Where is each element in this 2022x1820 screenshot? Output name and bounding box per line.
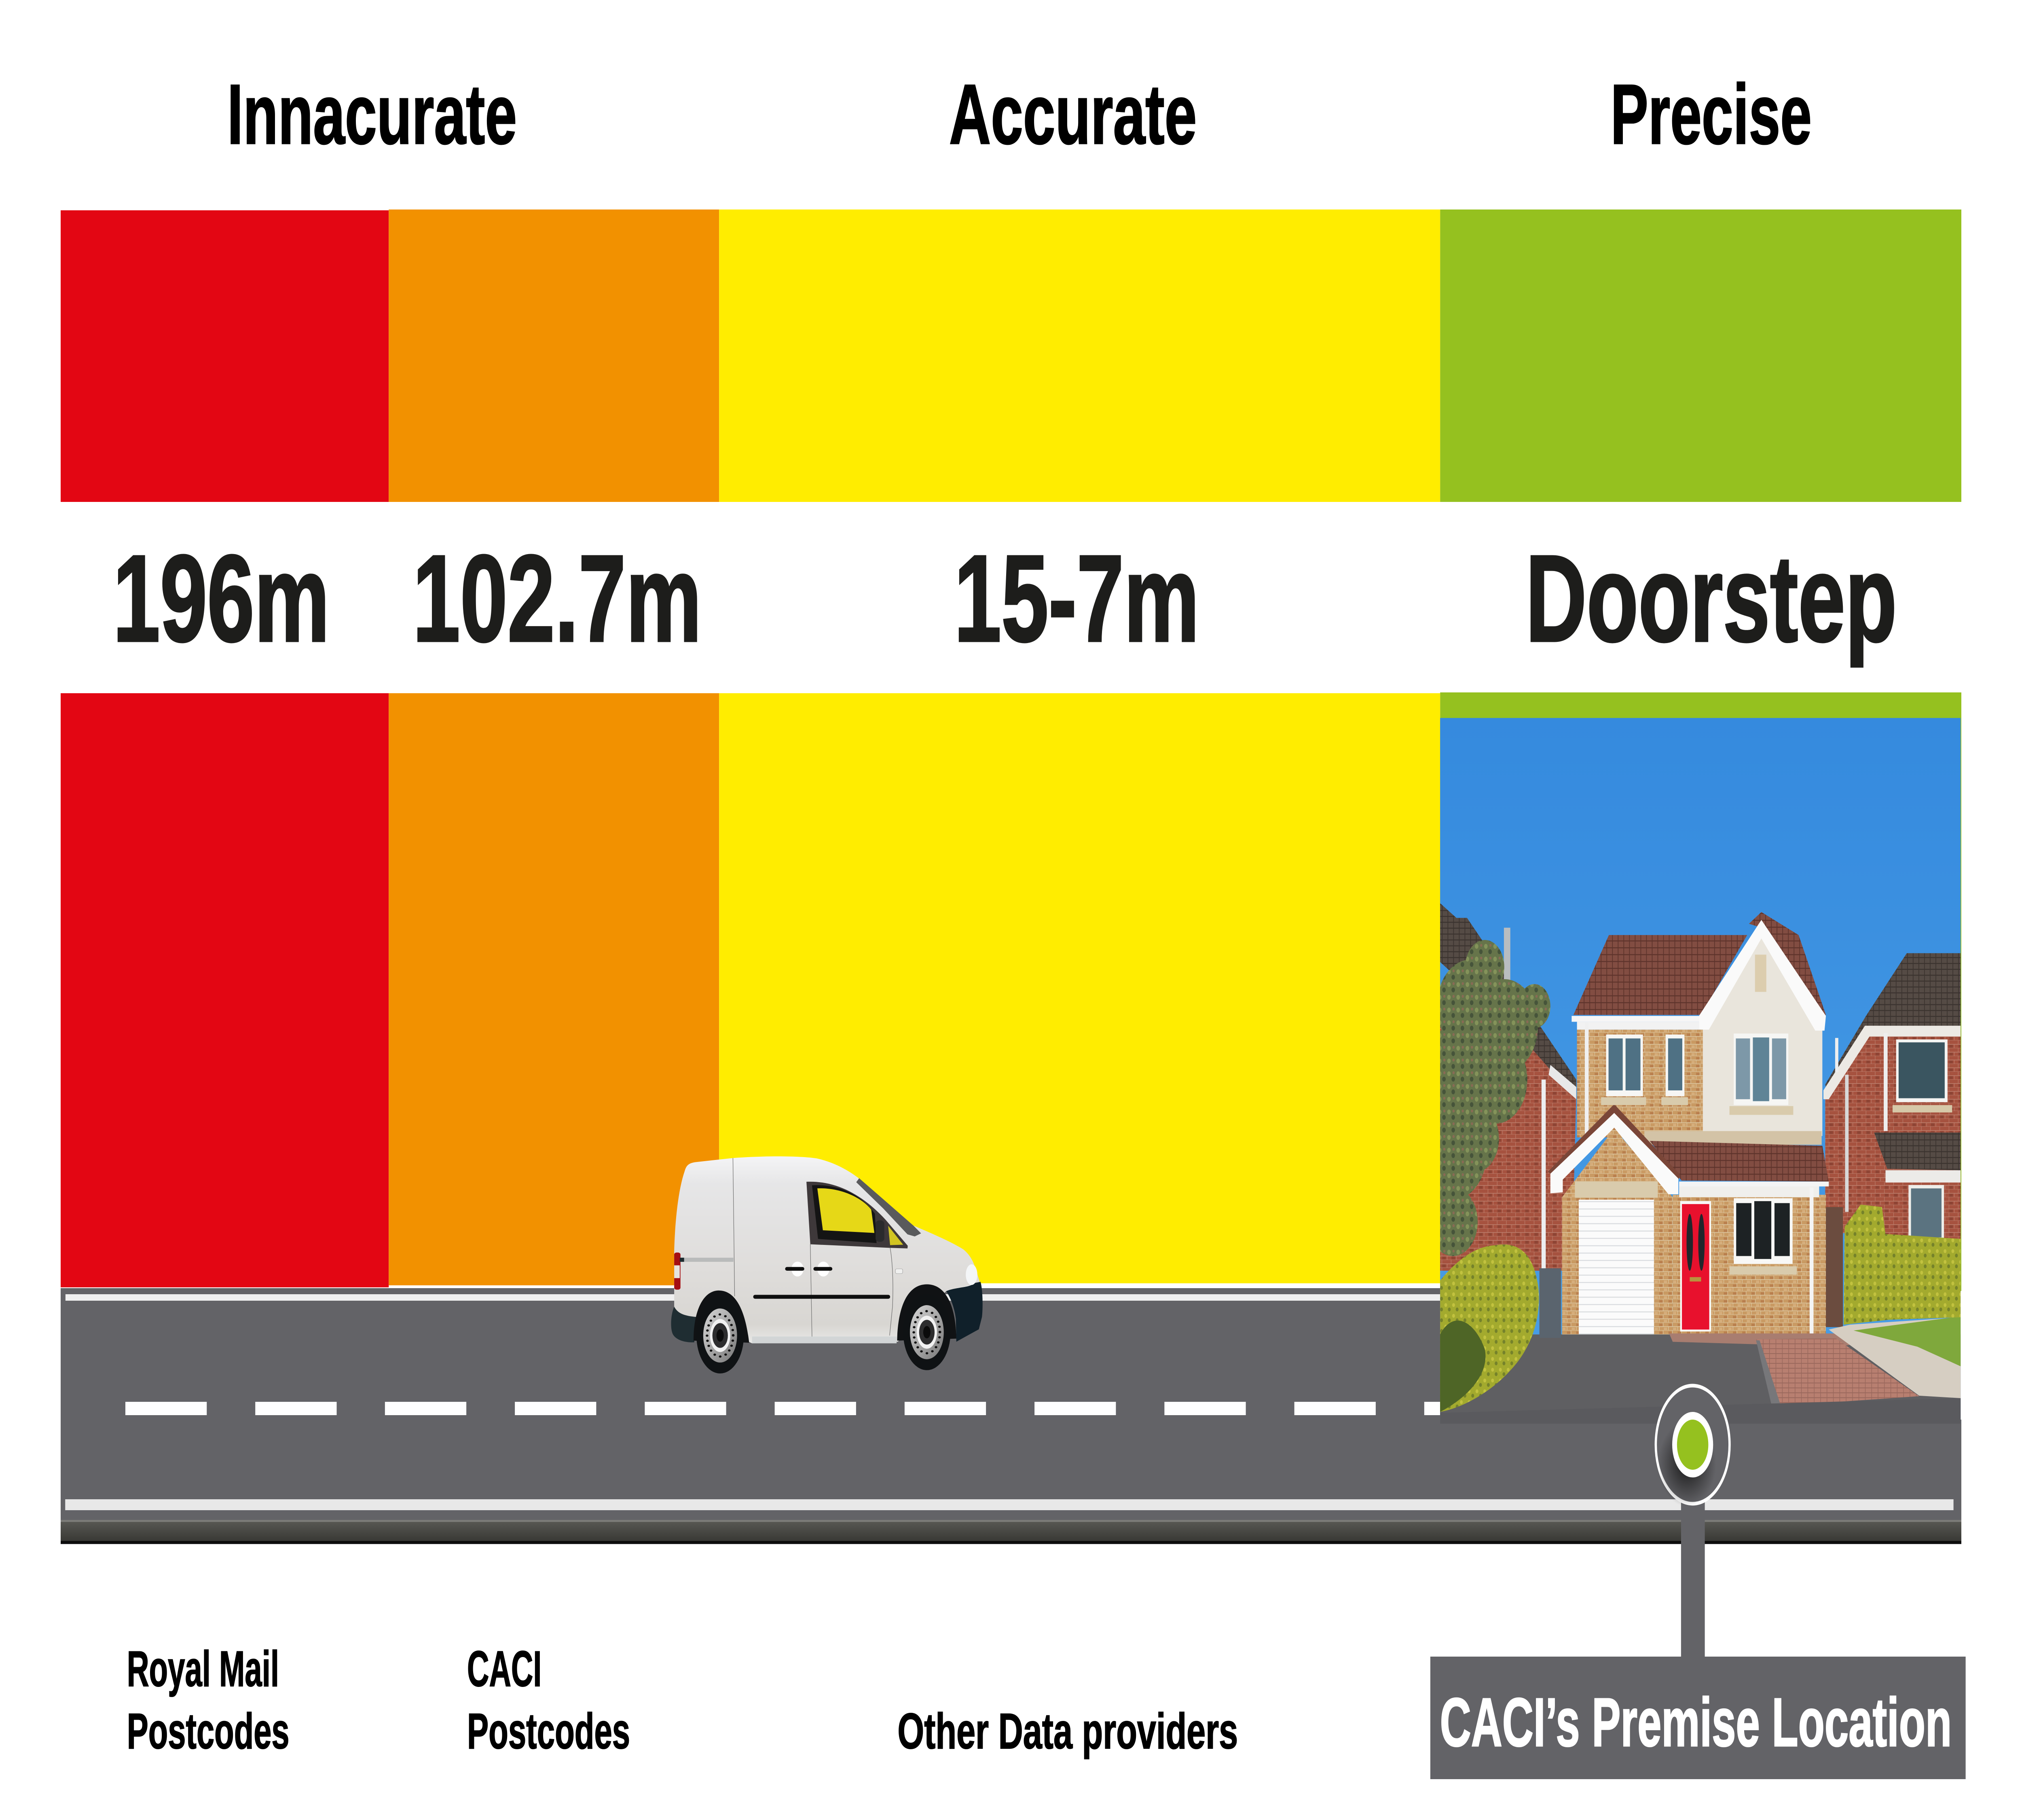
driveway — [1440, 1316, 1961, 1424]
van window frame — [806, 1182, 908, 1249]
distance: 196m: 196m — [113, 529, 330, 667]
label: CACI Postcodes — [467, 1640, 630, 1759]
red front door — [1680, 1201, 1711, 1331]
heading: Innacurate: Innacurate — [227, 67, 517, 162]
van sill — [752, 1337, 897, 1343]
band: red upper — [61, 210, 389, 502]
van headlamp — [966, 1264, 977, 1285]
band: red lower — [61, 693, 389, 1287]
band: orange upper — [389, 210, 719, 502]
van wheel arches — [694, 1285, 956, 1343]
label box: CACI's Premise Location — [1430, 1657, 1966, 1779]
label: Royal Mail Postcodes: Postcodes — [127, 1703, 290, 1759]
tree — [1440, 940, 1550, 1256]
road centre dashes — [125, 1402, 1440, 1415]
band: green lower — [1440, 692, 1961, 1291]
label: Royal Mail Postcodes: Royal Mail — [127, 1640, 279, 1697]
label: CACI Postcodes: CACI — [467, 1640, 541, 1697]
left neighbour house — [1440, 903, 1576, 1271]
van front bumper — [946, 1282, 983, 1342]
upper windows — [1601, 1033, 1793, 1115]
label box: CACI's Premise Location: CACI’s Premise Location — [1440, 1685, 1952, 1761]
band: green upper — [1440, 210, 1961, 502]
van front wheel — [903, 1294, 950, 1370]
van body — [674, 1156, 980, 1343]
wheelie bin — [1540, 1268, 1561, 1338]
label: CACI Postcodes: Postcodes — [467, 1703, 630, 1759]
road — [61, 1288, 1961, 1544]
van tail light — [674, 1253, 681, 1290]
hedges — [1440, 1204, 1961, 1412]
van — [671, 1156, 983, 1373]
heading: Precise: Precise — [1610, 67, 1812, 162]
label: Other Data providers: Other Data providers — [897, 1703, 1238, 1759]
connector stem — [1681, 1456, 1705, 1658]
right neighbour house — [1823, 953, 1961, 1327]
van rear bumper — [671, 1307, 697, 1342]
band: yellow lower — [719, 693, 1440, 1283]
van mirror — [876, 1220, 884, 1242]
lower window — [1730, 1198, 1797, 1275]
garage door — [1579, 1200, 1654, 1338]
main house walls and roof — [1548, 912, 1829, 1340]
band: yellow upper — [719, 210, 1440, 502]
van side window — [817, 1188, 874, 1233]
heading: Accurate: Accurate — [949, 67, 1197, 162]
van rear wheel — [696, 1297, 744, 1373]
label: Royal Mail Postcodes — [127, 1640, 290, 1759]
van seams and trim — [680, 1158, 903, 1337]
location pin — [1656, 1386, 1730, 1507]
van windscreen strip — [856, 1178, 921, 1236]
distance: 15-7m: 15-7m — [954, 529, 1199, 667]
band: orange lower — [389, 693, 719, 1285]
photo: detached brick house — [1419, 718, 1961, 1424]
distance: Doorstep: Doorstep — [1526, 529, 1897, 667]
distance: 102.7m: 102.7m — [413, 529, 702, 667]
